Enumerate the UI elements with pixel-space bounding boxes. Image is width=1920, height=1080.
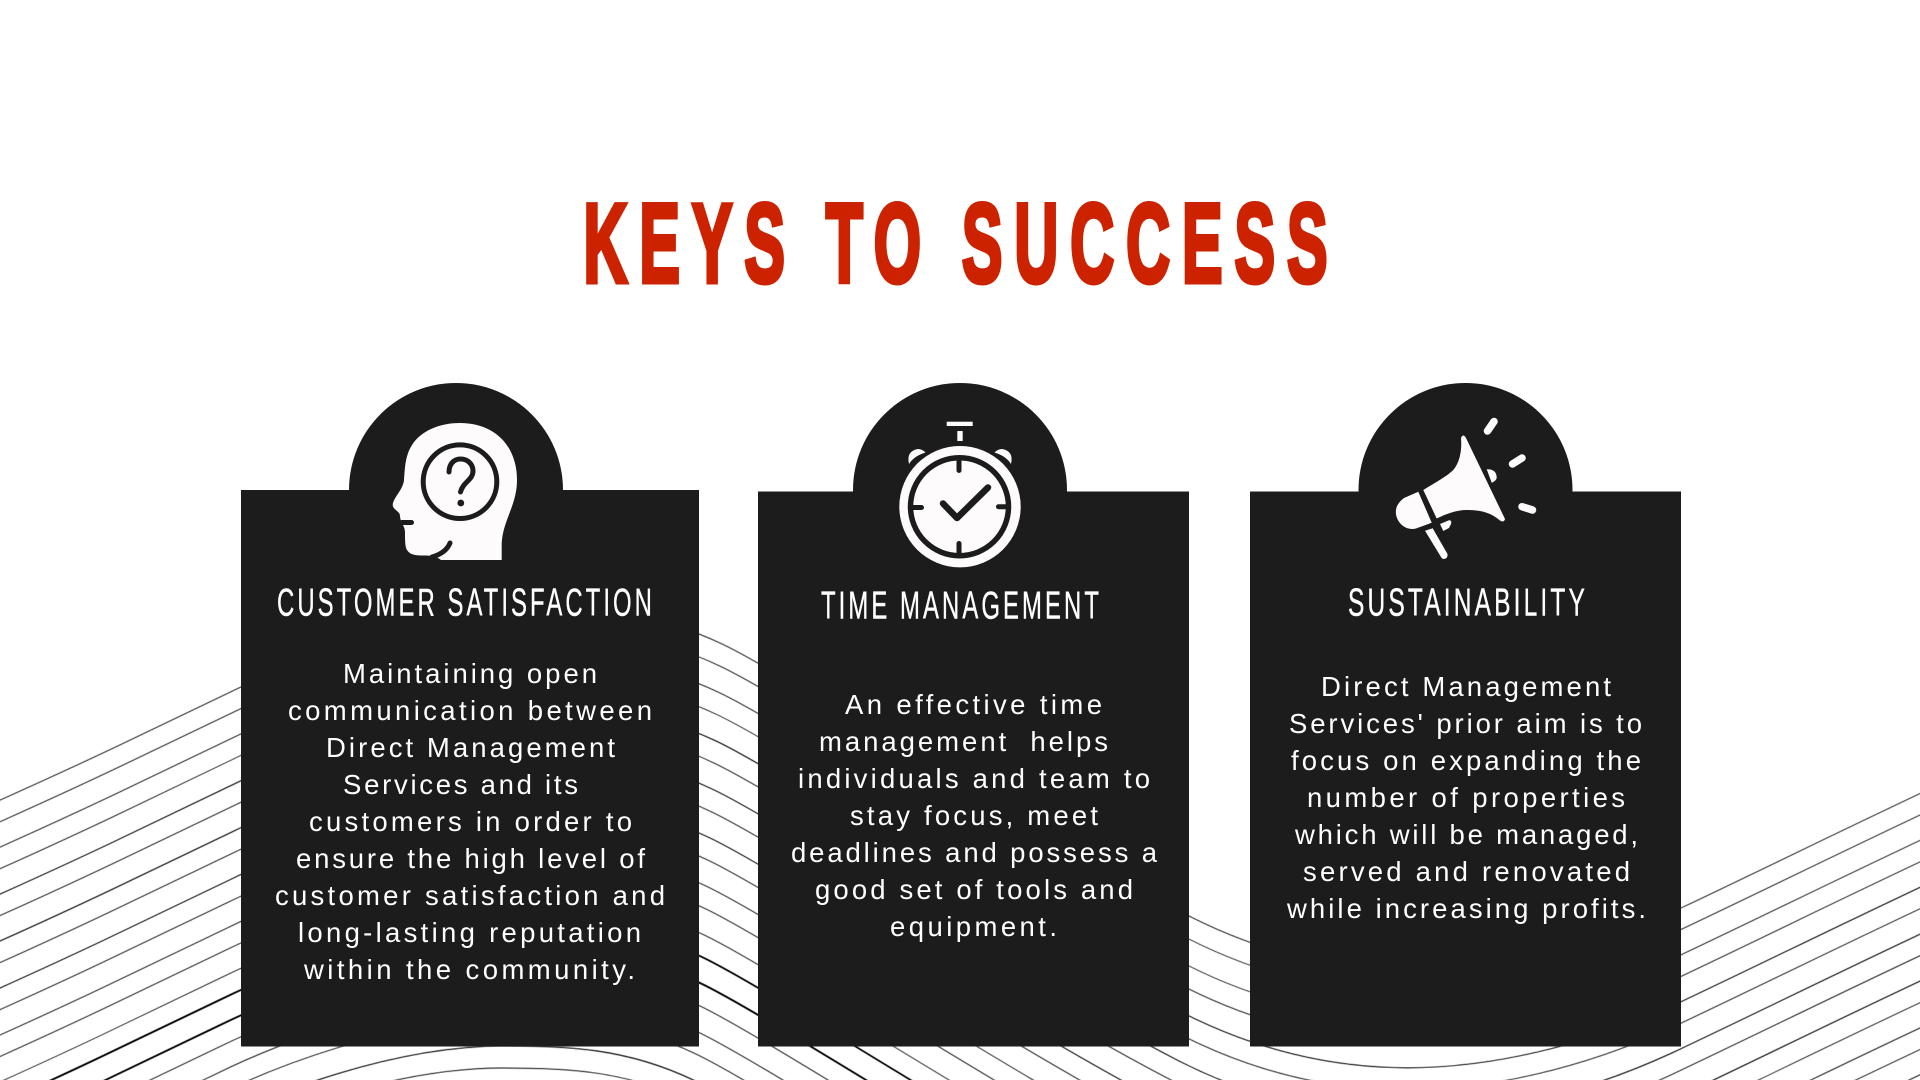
panel: customer satisfaction bbox=[241, 383, 699, 1046]
body text: Direct Management bbox=[326, 732, 615, 763]
body text: long-lasting reputation bbox=[298, 917, 641, 948]
body text: served and renovated bbox=[1303, 856, 1630, 887]
body text bbox=[1286, 671, 1646, 924]
heading: TIME MANAGEMENT bbox=[821, 584, 1102, 628]
body text: focus on expanding the bbox=[1291, 745, 1641, 776]
body text: deadlines and possess a bbox=[791, 837, 1158, 868]
body text: communication between bbox=[288, 695, 652, 726]
body text: customers in order to bbox=[309, 806, 632, 837]
body text: while increasing profits. bbox=[1286, 893, 1646, 924]
panel: sustainability bbox=[1250, 383, 1681, 1046]
body text: Services' prior aim is to bbox=[1289, 708, 1642, 739]
body text: An effective time bbox=[845, 689, 1102, 720]
body text: Maintaining open bbox=[343, 658, 597, 689]
body text bbox=[791, 689, 1158, 942]
panel: time management bbox=[758, 383, 1189, 1046]
body text: within the community. bbox=[303, 954, 635, 985]
icon: head with question mark bbox=[393, 423, 517, 560]
icon: megaphone bbox=[1396, 422, 1532, 559]
body text: individuals and team to bbox=[798, 763, 1150, 794]
body text: which will be managed, bbox=[1294, 819, 1638, 850]
body text: equipment. bbox=[890, 911, 1057, 942]
icon: stopwatch with check mark bbox=[899, 422, 1021, 567]
heading: SUSTAINABILITY bbox=[1348, 582, 1588, 624]
body text: management helps bbox=[819, 726, 1108, 757]
body text: Direct Management bbox=[1321, 671, 1611, 702]
body text: number of properties bbox=[1307, 782, 1625, 813]
body text: stay focus, meet bbox=[850, 800, 1098, 831]
body text bbox=[275, 658, 665, 985]
body text: ensure the high level of bbox=[296, 843, 645, 874]
body text: Services and its bbox=[343, 769, 578, 800]
body text: customer satisfaction and bbox=[275, 880, 665, 911]
body text: good set of tools and bbox=[815, 874, 1133, 905]
heading: CUSTOMER SATISFACTION bbox=[277, 582, 655, 624]
